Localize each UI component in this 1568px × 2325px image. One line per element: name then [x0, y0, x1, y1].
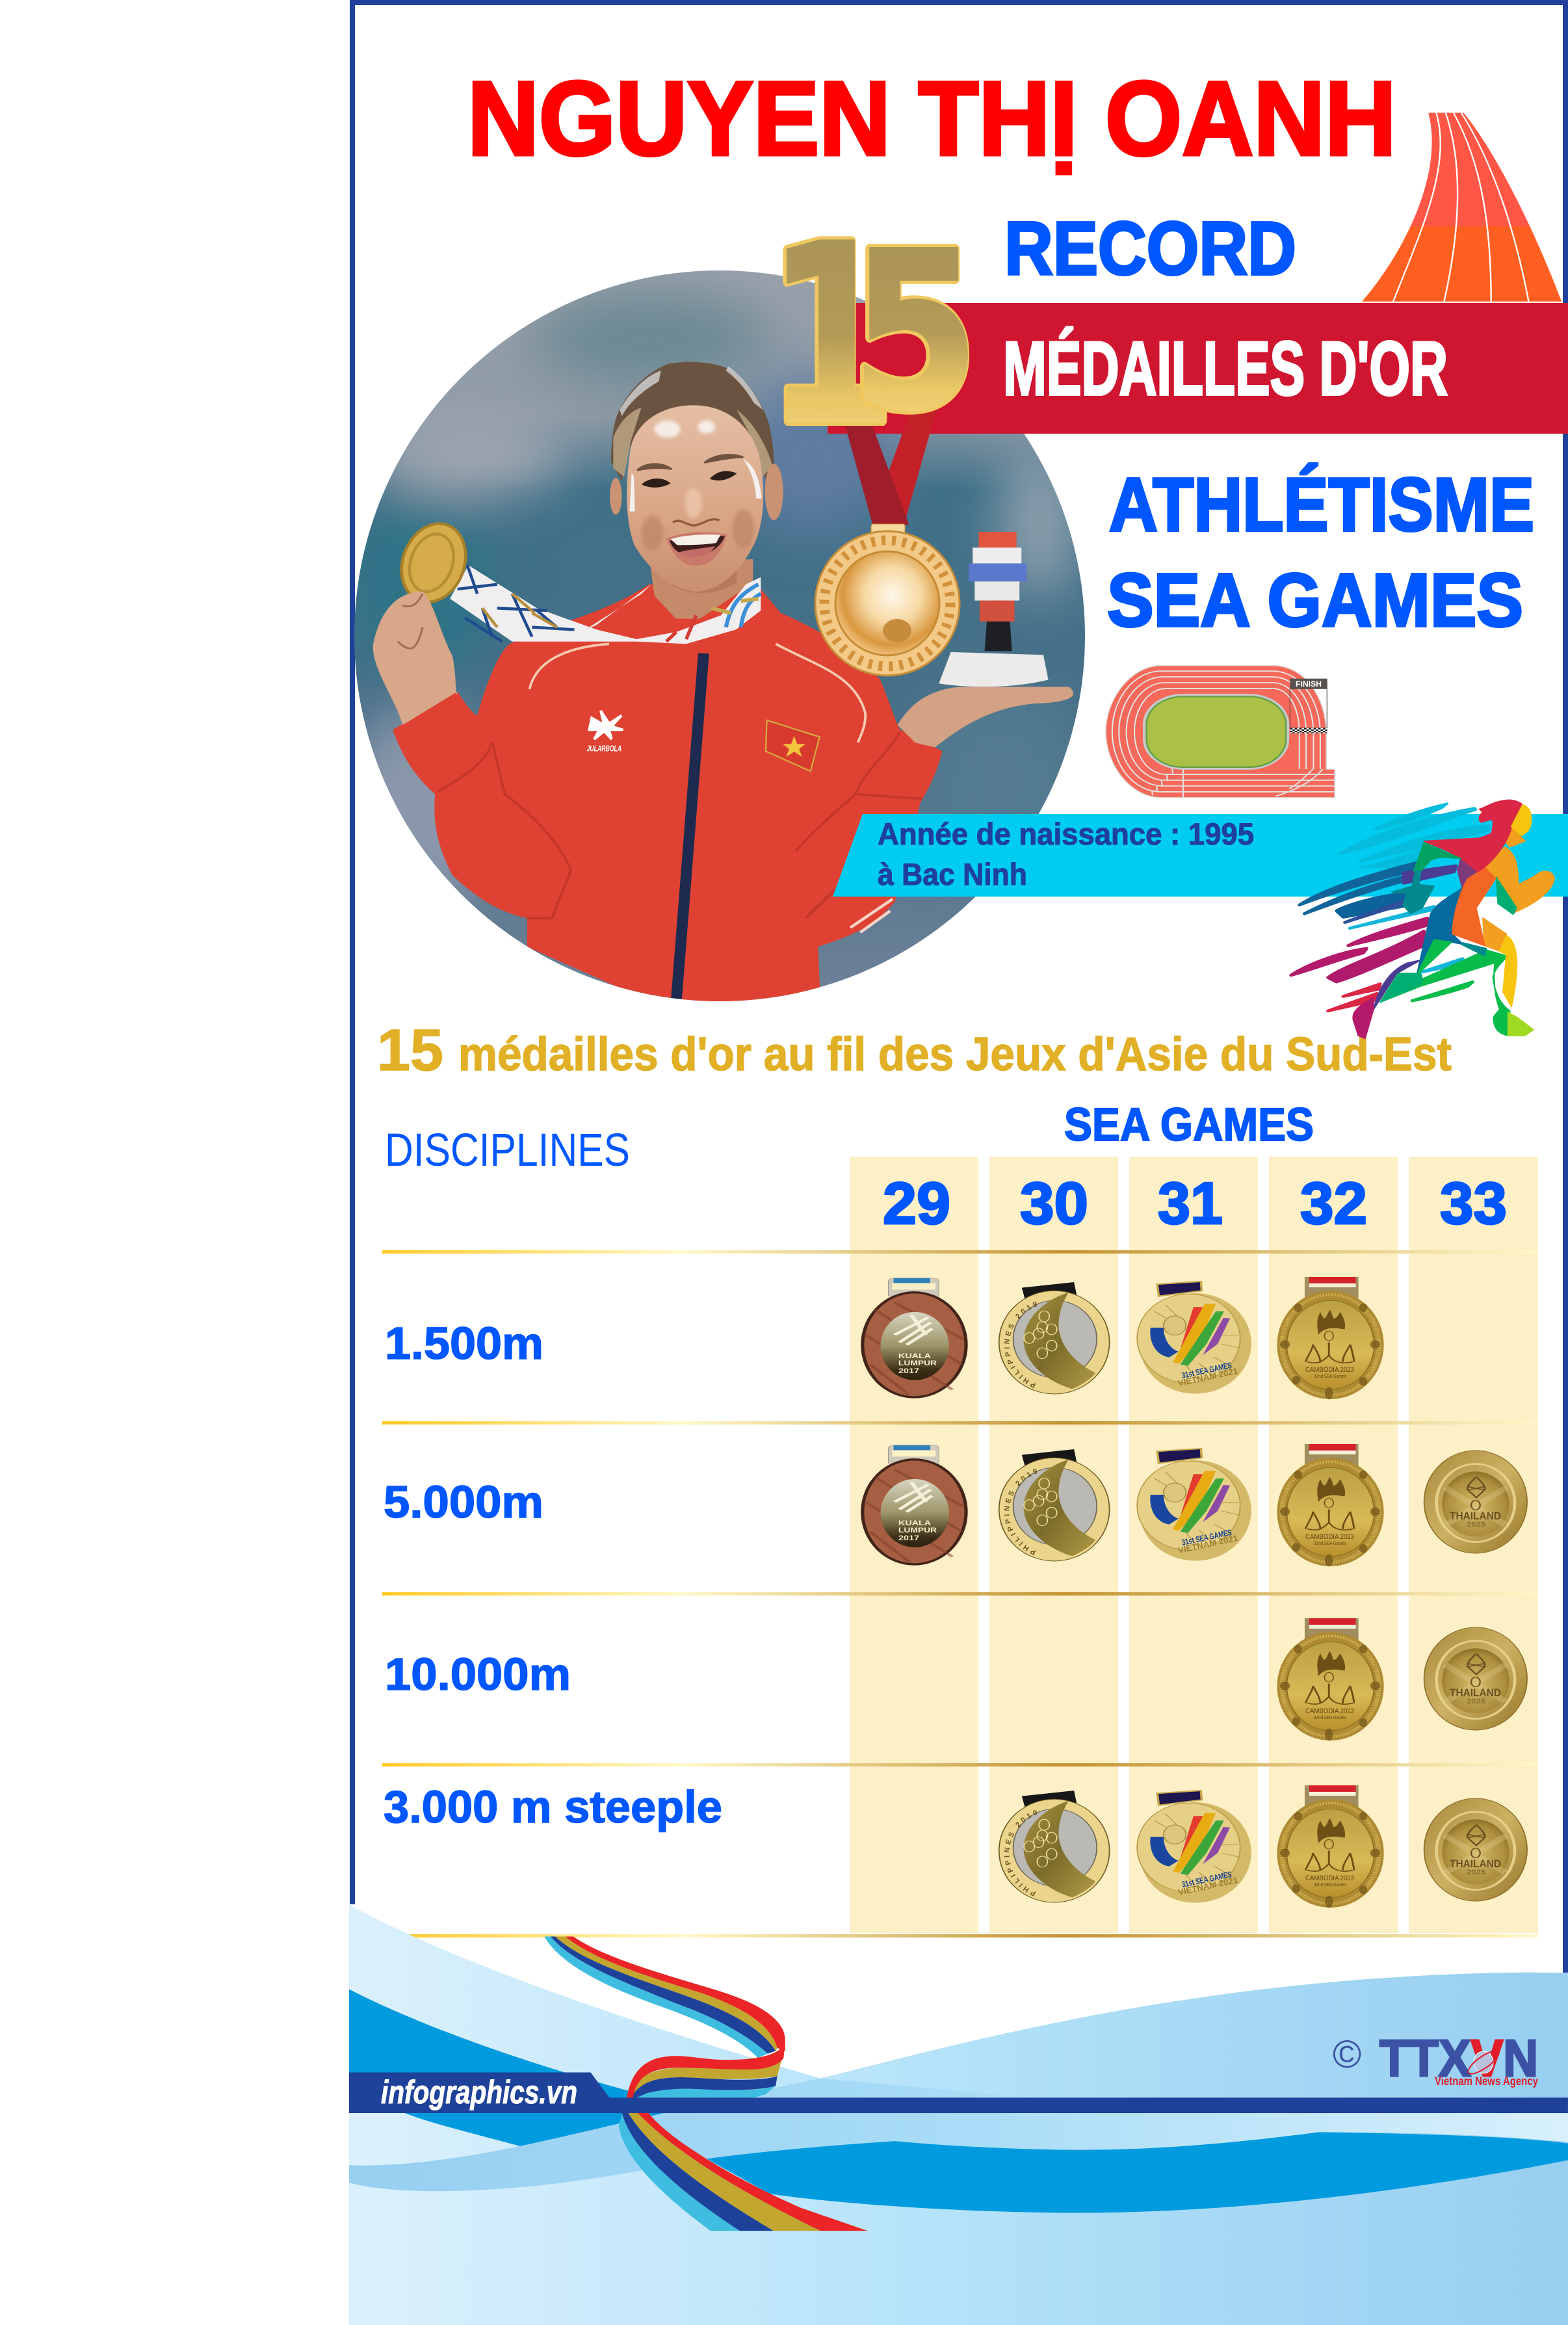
medal: steeple SEA Games 33: THAILAND [1450, 1858, 1501, 1870]
medal: 1.500m SEA Games 31: 31st SEA GAMES [1181, 1360, 1233, 1380]
column numbers: 32 [1300, 1171, 1367, 1237]
icon: big gold medal [815, 524, 960, 676]
column numbers: 29 [883, 1171, 950, 1237]
icon: running track curve [1362, 112, 1561, 302]
medal: 5.000m SEA Games 31 [1137, 1449, 1251, 1561]
medal: 5.000m SEA Games 29: LUMPUR [898, 1527, 937, 1534]
athlete photo [338, 270, 1086, 1008]
medal: 10.000m SEA Games 32: CAMBODIA 2023 [1305, 1707, 1354, 1715]
left hand holding gold medal [373, 516, 476, 725]
medal: 10.000m SEA Games 33: 2025 [1467, 1698, 1485, 1705]
text: infographics.vn: infographics.vn [381, 2074, 577, 2110]
medal: steeple SEA Games 31: VIETNAM 2021 [1177, 1875, 1239, 1897]
icon: big gold number 15: 5 [852, 207, 979, 458]
medal: 1.500m SEA Games 29: LUMPUR [898, 1360, 937, 1367]
text: birth info: Année de naissance : 1995 [878, 817, 1254, 851]
medal: 1.500m SEA Games 31 [1137, 1281, 1251, 1394]
neck and head [610, 362, 783, 619]
medal: 5.000m SEA Games 29 [861, 1445, 968, 1566]
medal: steeple SEA Games 30: PHILIPPINES 2019 [1004, 1810, 1038, 1897]
medal: 5.000m SEA Games 33: 2025 [1467, 1521, 1485, 1529]
footer waves [349, 1904, 1568, 2325]
medal: 5.000m SEA Games 31: VIETNAM 2021 [1177, 1533, 1239, 1555]
medal: 1.500m SEA Games 32: CAMBODIA 2023 [1305, 1366, 1354, 1374]
medal: 5.000m SEA Games 31: 31st SEA GAMES [1181, 1527, 1233, 1547]
logo: TTXVN: TTXVN [1379, 2029, 1538, 2087]
column numbers: 30 [1020, 1171, 1088, 1237]
discipline labels: 1.500m [385, 1318, 543, 1369]
icon: big gold number 15: 1 [766, 193, 896, 479]
medal: steeple SEA Games 33 [1424, 1798, 1527, 1901]
column numbers: 31 [1158, 1171, 1223, 1237]
icon: athletics stadium: FINISH [1296, 679, 1322, 689]
discipline labels [384, 1318, 722, 1832]
medal: steeple SEA Games 31: 31st SEA GAMES [1181, 1869, 1233, 1889]
cyan info banner [833, 814, 1568, 897]
discipline labels: 3.000 m steeple [384, 1781, 722, 1832]
medal: 5.000m SEA Games 29: KUALA [898, 1519, 931, 1527]
column numbers [883, 1171, 1507, 1237]
photo background [354, 270, 1086, 1002]
title: NGUYEN THỊ OANH [467, 60, 1396, 177]
text: birth info [878, 817, 1254, 891]
decorative ribbon [544, 1936, 867, 2231]
navy footer bar with tag [349, 2073, 1568, 2113]
medal: 1.500m SEA Games 31: VIETNAM 2021 [1177, 1366, 1239, 1388]
medal: 1.500m SEA Games 32 [1277, 1277, 1384, 1399]
medal: 1.500m SEA Games 29: 2017 [898, 1367, 919, 1375]
athlete body in red jacket [393, 585, 943, 1008]
medal: steeple SEA Games 32: CAMBODIA 2023 [1305, 1874, 1354, 1882]
discipline labels: 10.000m [385, 1649, 571, 1700]
logo: TTXVN: © [1333, 2032, 1361, 2076]
medal: 5.000m SEA Games 32: 32nd SEA Games [1314, 1542, 1346, 1546]
heading: RECORD: RECORD [1004, 206, 1296, 291]
medal: 5.000m SEA Games 33: THAILAND [1450, 1510, 1501, 1522]
medal: 5.000m SEA Games 33 [1424, 1451, 1527, 1553]
icon: big gold number 15: 1 [767, 193, 897, 479]
icon: colourful runner [1291, 800, 1554, 1038]
medal: 5.000m SEA Games 30: PHILIPPINES 2019 [1004, 1469, 1038, 1555]
medal: 1.500m SEA Games 30 [999, 1282, 1110, 1394]
medal: 5.000m SEA Games 29: 2017 [898, 1534, 919, 1542]
medal: 5.000m SEA Games 32: CAMBODIA 2023 [1305, 1533, 1354, 1541]
logo: TTXVN: Vietnam News Agency [1435, 2075, 1538, 2088]
discipline labels: 5.000m [384, 1477, 543, 1527]
medal: 1.500m SEA Games 29 [861, 1278, 968, 1399]
icon: athletics stadium [1106, 666, 1335, 798]
medal: 1.500m SEA Games 30: PHILIPPINES 2019 [1004, 1302, 1038, 1388]
medal ribbon straps [843, 412, 936, 525]
Vietnam flag patch [766, 720, 820, 771]
medal: 5.000m SEA Games 32 [1277, 1444, 1384, 1566]
medal: 10.000m SEA Games 32: 32nd SEA Games [1314, 1716, 1346, 1720]
jacket logo: JULARBOLA [587, 744, 621, 753]
medal: steeple SEA Games 31 [1137, 1791, 1251, 1903]
medal: 1.500m SEA Games 32: 32nd SEA Games [1314, 1374, 1346, 1379]
medal: 10.000m SEA Games 33: THAILAND [1450, 1687, 1501, 1699]
medal: steeple SEA Games 30 [999, 1791, 1110, 1902]
text: birth info: à Bac Ninh [878, 857, 1027, 891]
medal: 1.500m SEA Games 29: KUALA [898, 1352, 931, 1360]
table heading: SEA Games: SEA GAMES [1064, 1099, 1314, 1151]
table heading: disciplines: DISCIPLINES [385, 1125, 630, 1176]
medal: 5.000m SEA Games 30 [999, 1449, 1110, 1562]
frame border [350, 0, 1568, 1973]
jacket logo [587, 711, 623, 753]
lanyard [450, 565, 761, 644]
medal: 10.000m SEA Games 33 [1424, 1627, 1527, 1730]
subtitle: 15 gold medals: 15 [377, 1018, 443, 1083]
right hand with trophy [898, 532, 1073, 748]
medal: steeple SEA Games 32: 32nd SEA Games [1314, 1883, 1346, 1887]
subtitle: 15 gold medals: médailles d'or au fil des Jeux d'Asie du Sud-Est [458, 1029, 1452, 1081]
medal: steeple SEA Games 33: 2025 [1467, 1869, 1485, 1876]
red banner [828, 303, 1568, 434]
table columns [850, 1157, 1538, 1933]
medal: steeple SEA Games 32 [1277, 1785, 1384, 1908]
column numbers: 33 [1440, 1171, 1507, 1237]
heading: SEA Games: SEA GAMES [1107, 558, 1523, 642]
medal: 10.000m SEA Games 32 [1277, 1618, 1384, 1740]
icon: big gold number 15: 5 [850, 207, 978, 458]
